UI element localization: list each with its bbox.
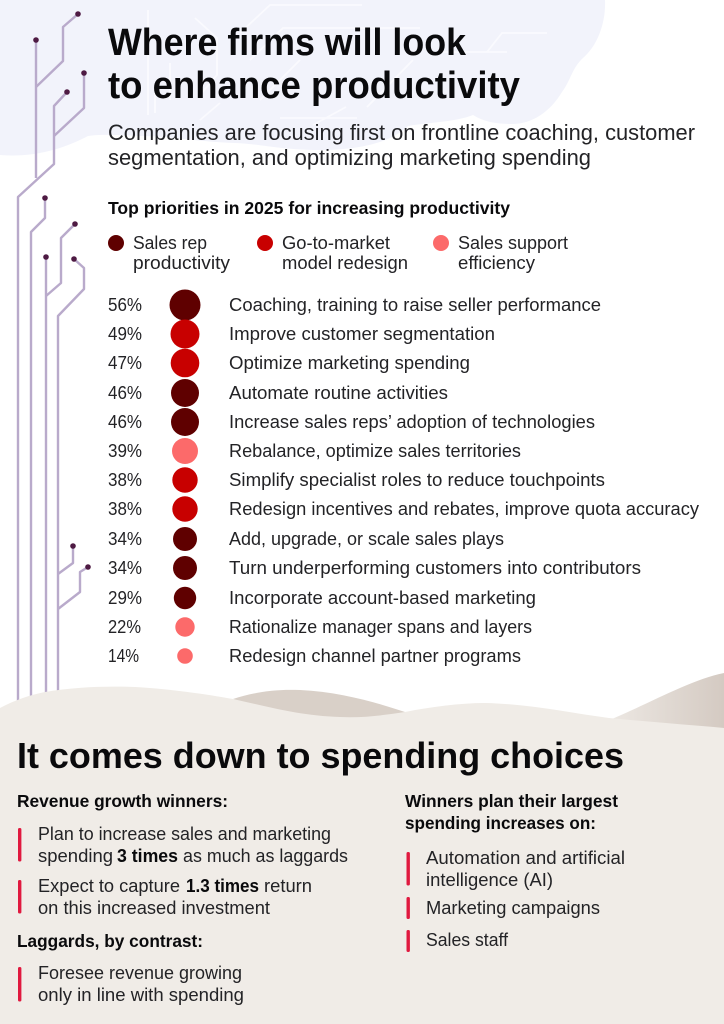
row: territories [108, 438, 521, 464]
row: account-based marketing [108, 587, 536, 609]
title: to enhance productivity [108, 65, 520, 107]
bullet: laggards: only in line with spending [38, 984, 244, 1005]
row: adoption [108, 408, 595, 436]
row: automate [108, 379, 448, 407]
column: spending increases: spending increases on: [405, 813, 596, 833]
hills [233, 673, 724, 735]
bullet: marketing campaigns: Marketing campaigns [426, 897, 600, 918]
row: account-based marketing: 29% [108, 587, 142, 608]
row: specialist roles [108, 467, 605, 493]
row: automate: 46% [108, 382, 142, 403]
bullet: 3 times [18, 823, 348, 866]
row: incentives [108, 496, 700, 522]
chart heading: Top priorities in 2025 for increasing productivity [108, 198, 510, 218]
column: winners and laggards: Revenue growth winners: [17, 791, 228, 811]
row: incentives: 38% [108, 498, 142, 519]
bottom panel [0, 687, 724, 1024]
bullet: automation and AI: intelligence (AI) [426, 869, 553, 890]
row: sales plays [108, 527, 504, 551]
row: incentives: Redesign incentives and rebates, improve quota accuracy [229, 498, 700, 519]
bullet: laggards [18, 962, 244, 1005]
subtitle: segmentation, and optimizing marketing spending [108, 145, 591, 170]
legend: Sales support [458, 232, 568, 253]
circuit lines decoration [18, 11, 91, 702]
legend [108, 232, 568, 273]
bullet: laggards: Foresee revenue growing [38, 962, 242, 983]
row: specialist roles: 38% [108, 469, 142, 490]
subtitle [108, 120, 695, 170]
bullet: 3 times: spending [38, 845, 113, 866]
title [108, 22, 520, 107]
title: Where firms will look [108, 22, 467, 64]
row: manager spans: Rationalize manager spans and layers [229, 616, 532, 637]
bullet: 1.3 times [18, 875, 312, 918]
column: winners and laggards [17, 791, 348, 1005]
bullet: 3 times: as much as laggards [183, 845, 348, 866]
row: coaching: 56% [108, 294, 142, 315]
row: channel partners: Redesign channel partner programs [229, 645, 521, 666]
row: specialist roles: Simplify specialist roles to reduce touchpoints [229, 469, 605, 490]
row: segmentation [108, 320, 495, 348]
column: spending increases [405, 791, 625, 952]
row: account-based marketing: Incorporate account-based marketing [229, 587, 536, 608]
background cloud shape [0, 0, 605, 156]
column: spending increases: Winners plan their largest [405, 791, 618, 811]
row: channel partners: 14% [108, 645, 139, 666]
row: segmentation: Improve customer segmentation [229, 323, 495, 344]
row: marketing spending [108, 349, 470, 377]
column: winners and laggards: Laggards, by contrast: [17, 931, 203, 951]
priorities chart [108, 290, 700, 666]
row: adoption: 46% [108, 411, 142, 432]
row: sales plays: 34% [108, 528, 142, 549]
bullet: automation and AI: Automation and artificial [426, 847, 625, 868]
row: channel partners [108, 645, 521, 666]
row: sales plays: Add, upgrade, or scale sales plays [229, 528, 504, 549]
row: underperforming customers: Turn underperforming customers into contributors [229, 557, 641, 578]
row: segmentation: 49% [108, 323, 142, 344]
legend: model redesign [282, 252, 408, 273]
section heading: It comes down to spending choices [17, 735, 624, 776]
row: manager spans [108, 616, 532, 637]
row: territories: 39% [108, 440, 142, 461]
row: underperforming customers [108, 556, 641, 580]
subtitle: Companies are focusing first on frontline coaching, customer [108, 120, 695, 145]
legend: Go-to-market [282, 232, 390, 253]
legend: productivity [133, 252, 231, 273]
bullet: 1.3 times: on this increased investment [38, 897, 270, 918]
bullet: sales staff: Sales staff [426, 929, 509, 950]
bullet: 1.3 times: return [264, 875, 312, 896]
row: marketing spending: Optimize marketing spending [229, 352, 470, 373]
row: coaching [108, 290, 601, 320]
row: coaching: Coaching, training to raise seller performance [229, 294, 601, 315]
bullet: 1.3 times: 1.3 times [186, 875, 259, 896]
bullet: 3 times: Plan to increase sales and marketing [38, 823, 331, 844]
row: underperforming customers: 34% [108, 557, 142, 578]
bullet: automation and AI [406, 847, 625, 890]
row: territories: Rebalance, optimize sales territories [229, 440, 521, 461]
row: marketing spending: 47% [108, 352, 142, 373]
row: adoption: Increase sales reps’ adoption of technologies [229, 411, 595, 432]
bullet: 1.3 times: Expect to capture [38, 875, 180, 896]
legend: Sales rep [133, 232, 207, 253]
row: manager spans: 22% [108, 616, 141, 637]
bullet: 3 times: 3 times [117, 845, 178, 866]
legend: efficiency [458, 252, 536, 273]
row: automate: Automate routine activities [229, 382, 448, 403]
